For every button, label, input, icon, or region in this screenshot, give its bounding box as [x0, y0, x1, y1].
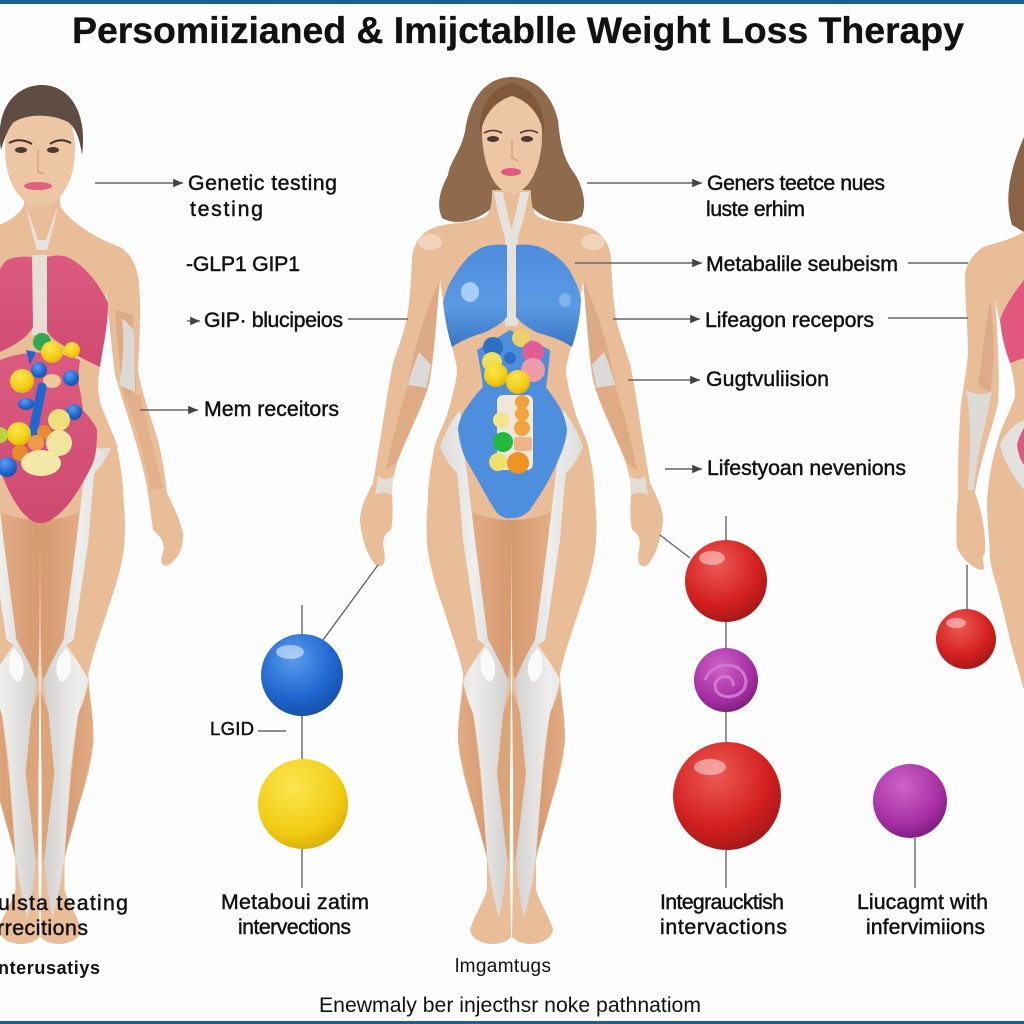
left figure arm muscle [115, 310, 136, 400]
label: lmgamtugs: lmgamtugs [455, 956, 551, 977]
connector: lifeagon to right figure [888, 317, 968, 319]
title: Persomiizianed & Imijctablle Weight Loss Therapy [72, 9, 964, 51]
sphere: yellow [258, 759, 348, 849]
right figure arm fascia [966, 390, 992, 490]
top border [0, 0, 1024, 4]
left figure face [5, 93, 75, 207]
arrows and labels [95, 171, 968, 480]
right figure hair [1008, 137, 1024, 232]
sphere: purple swirl [694, 648, 758, 712]
left figure face details [9, 140, 71, 190]
arrow: lifestyoan [665, 468, 702, 470]
label: integraucktish: Integraucktish [660, 890, 784, 914]
label: infervimiions: infervimiions [866, 915, 985, 939]
label: lifestyoan: Lifestyoan nevenions [707, 456, 906, 480]
arrow: metabolic [575, 262, 702, 264]
sphere: red large [673, 742, 781, 850]
left figure [0, 85, 183, 944]
connectors for spheres [258, 516, 967, 888]
label: interventions: intervections [238, 915, 351, 939]
central hair back [439, 77, 584, 222]
central lungs [443, 245, 581, 347]
left figure legs [0, 410, 125, 944]
right figure [956, 137, 1024, 690]
left figure sternum [32, 255, 47, 335]
arrow: genetic testing left [95, 182, 183, 184]
central face details [484, 130, 538, 176]
label: nterusatiys: nterusatiys [0, 958, 100, 978]
label: lifeagon: Lifeagon recepors [705, 308, 874, 332]
central face [482, 95, 542, 194]
left figure forearm [125, 395, 163, 490]
central lung highlights [461, 282, 571, 307]
right figure arm muscle [978, 300, 994, 392]
connector: metabolic to right figure [908, 262, 968, 264]
sphere: purple right [873, 764, 947, 838]
central abdomen [458, 330, 567, 518]
left figure lungs [0, 256, 108, 367]
central body [360, 190, 663, 944]
label: GLP1 GIP1: -GLP1 GIP1 [186, 252, 300, 276]
left figure abdomen [0, 352, 97, 523]
label: intervactions: intervactions [660, 915, 787, 939]
connector: GIP to central figure [348, 318, 408, 320]
right figure hip [1000, 420, 1024, 490]
left figure neck fascia [26, 205, 58, 250]
sphere: blue [261, 634, 343, 716]
sphere: red right [936, 609, 996, 669]
label: metabolic interventions: Metaboui zatim [221, 890, 369, 914]
left figure arm fascia [119, 318, 135, 392]
arrow: GIP left [187, 320, 200, 322]
arrow: mem receitors [140, 409, 198, 411]
label: metabolic: Metabalile seubeism [706, 252, 898, 276]
label: genetic testing: Genetic testing [188, 171, 337, 195]
left figure organs [0, 333, 82, 477]
arrow: genes [587, 182, 702, 184]
label: liucagmt with: Liucagmt with [857, 890, 988, 914]
left figure hair [0, 85, 83, 155]
central hair part [480, 82, 544, 135]
label: mem receitors: Mem receitors [204, 397, 339, 421]
arrow: gugtvuliision [628, 379, 700, 381]
label: genes: Geners teetce nues [707, 171, 885, 195]
sphere: red top [685, 540, 767, 622]
label: testing: testing [190, 197, 263, 221]
right figure lung [1000, 280, 1024, 363]
label: luste: luste erhim [706, 197, 805, 221]
central figure [360, 77, 663, 944]
footer caption: Enewmaly ber injecthsr noke pathnatiom [319, 994, 701, 1017]
label: ulsta teating: ulsta teating [0, 891, 128, 915]
bottom border [0, 1021, 1024, 1024]
label: GIP blucipeios: GIP· blucipeios [204, 308, 343, 332]
label: gugtvuliision: Gugtvuliision [706, 367, 829, 391]
label: LGID: LGID [210, 718, 254, 739]
right figure body [956, 232, 1024, 690]
left figure upper body [0, 170, 183, 566]
central organs [482, 329, 545, 474]
arrow: lifeagon [613, 318, 700, 320]
